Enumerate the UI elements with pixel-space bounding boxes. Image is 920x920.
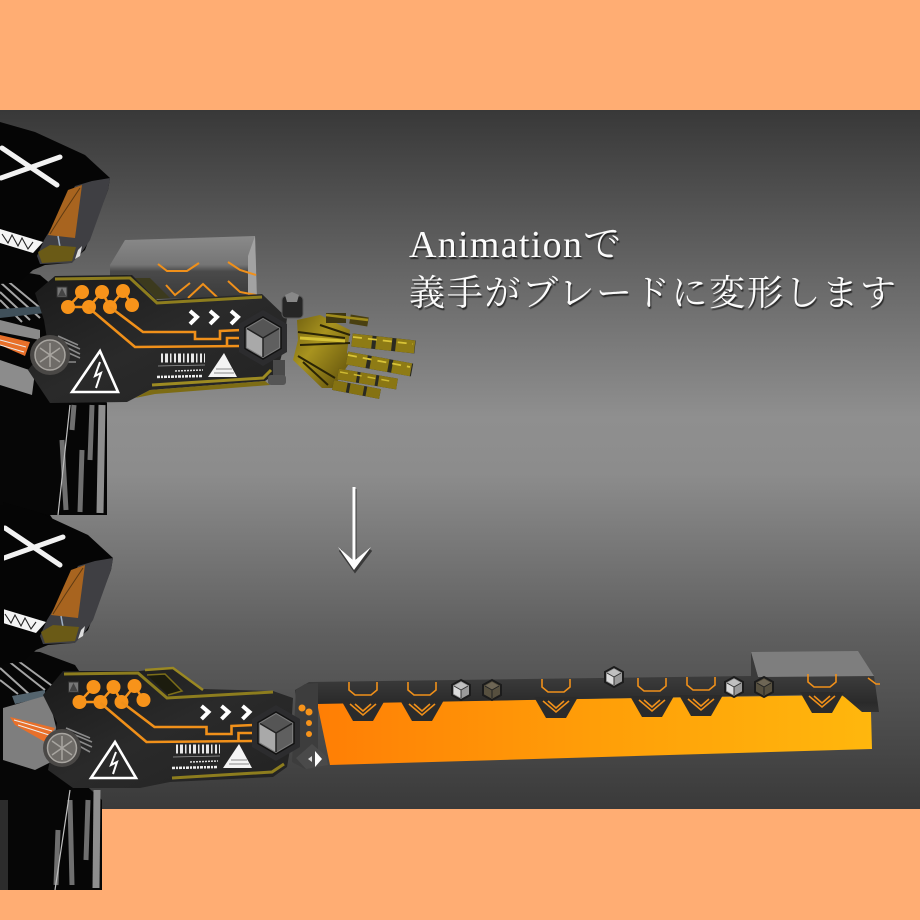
text: 義手がブレードに変形します <box>409 273 898 313</box>
bolt <box>43 728 92 767</box>
gauntlet with blade <box>43 667 300 788</box>
wrist cap <box>268 292 303 385</box>
top box <box>751 651 874 677</box>
blade notches <box>341 674 880 721</box>
orange blade <box>317 695 872 765</box>
prosthetic gauntlet <box>28 275 303 403</box>
alien label and logo <box>172 744 252 768</box>
alien label and logo <box>157 353 237 377</box>
body: lower figure torso <box>0 650 102 890</box>
background: gray gradient band <box>0 110 920 809</box>
fingers <box>333 337 415 394</box>
bolt <box>30 335 80 375</box>
warning triangle icon <box>91 742 136 778</box>
hood left edge <box>0 505 4 665</box>
body: upper figure torso <box>0 268 107 515</box>
blade root panel <box>292 683 328 769</box>
hex cube joint <box>239 310 287 366</box>
thumb <box>326 315 368 322</box>
hood: upper figure <box>0 122 110 284</box>
circuit, dots and chevrons <box>68 679 254 742</box>
text: Animationで <box>409 224 621 266</box>
arrow: down transformation <box>338 487 371 571</box>
figure: character with prosthetic hand <box>0 122 415 515</box>
warning triangle icon <box>72 351 118 392</box>
figure: character with blade <box>0 502 880 890</box>
circuit, dots and chevrons <box>57 284 242 347</box>
hex cube joint <box>252 705 300 761</box>
panel box behind forearm <box>110 236 257 300</box>
hood crown: lower figure <box>0 505 60 560</box>
blade hex joints <box>452 667 773 700</box>
golden hand <box>293 315 415 394</box>
hood: lower figure <box>3 502 113 664</box>
blade spine rail <box>292 651 880 769</box>
caption text <box>409 224 898 313</box>
